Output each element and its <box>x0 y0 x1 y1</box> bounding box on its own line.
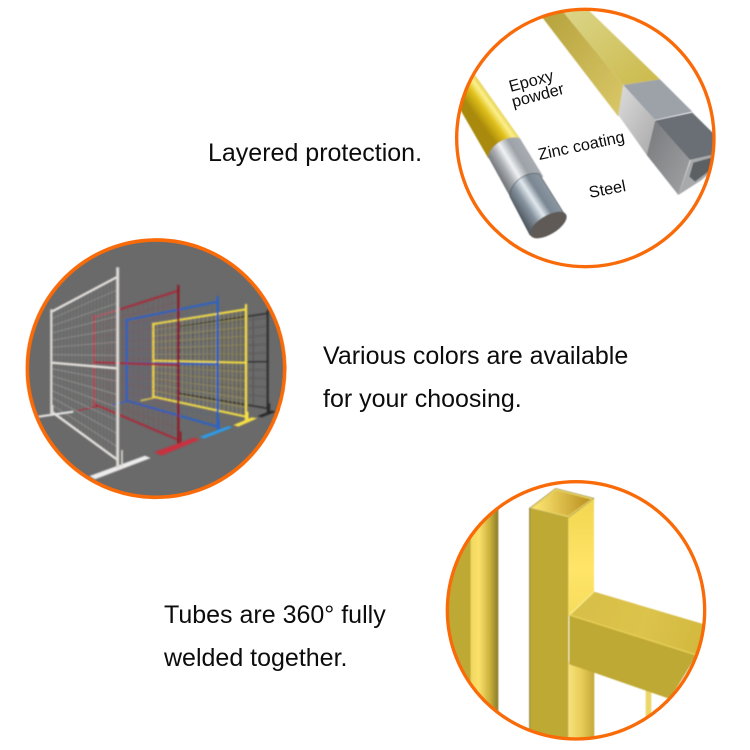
text: various colors: Various colors are available <box>323 342 628 370</box>
circle background <box>447 482 705 739</box>
layer labels <box>507 67 627 202</box>
floor markings <box>38 412 151 479</box>
text: welded tubes: Tubes are 360° fully <box>164 601 386 629</box>
text: welded tubes: welded together. <box>163 644 347 672</box>
black fence <box>178 310 276 417</box>
red fence <box>77 285 200 456</box>
round tube: zinc coating layer <box>488 137 543 197</box>
circle background <box>27 240 285 497</box>
heading: layered protection: Layered protection. <box>208 139 422 167</box>
text: welded tubes <box>163 601 386 672</box>
horizontal rail <box>569 592 707 699</box>
orange ring <box>457 9 714 267</box>
orange ring <box>27 240 285 497</box>
round tube: steel core <box>510 173 571 244</box>
layer labels: Steel <box>587 177 627 202</box>
blue fence <box>113 296 233 439</box>
text: various colors <box>323 342 628 413</box>
side tube, out of focus <box>443 495 498 742</box>
panel: layered protection <box>457 7 717 267</box>
white fence <box>51 267 122 468</box>
square tube: steel layer <box>647 113 717 195</box>
orange ring <box>447 482 705 739</box>
panel: welded tubes <box>443 482 707 745</box>
main post: right face <box>568 498 594 617</box>
square tube: epoxy powder layer <box>542 7 660 117</box>
yellow fence <box>141 304 257 427</box>
square tube: zinc coating layer <box>618 79 692 155</box>
layer labels: Zinc coating <box>536 128 626 164</box>
panel: color choices <box>27 240 285 497</box>
layer labels: powder <box>510 80 567 111</box>
thin mesh wire <box>646 690 651 720</box>
circle background <box>457 9 714 267</box>
round tube: epoxy powder layer <box>457 75 521 158</box>
lower post below the rail <box>568 662 594 745</box>
main post: open top <box>529 488 594 518</box>
main post: front face <box>529 508 568 745</box>
text: various colors: for your choosing. <box>323 385 522 413</box>
layer labels: Epoxy <box>507 67 556 96</box>
